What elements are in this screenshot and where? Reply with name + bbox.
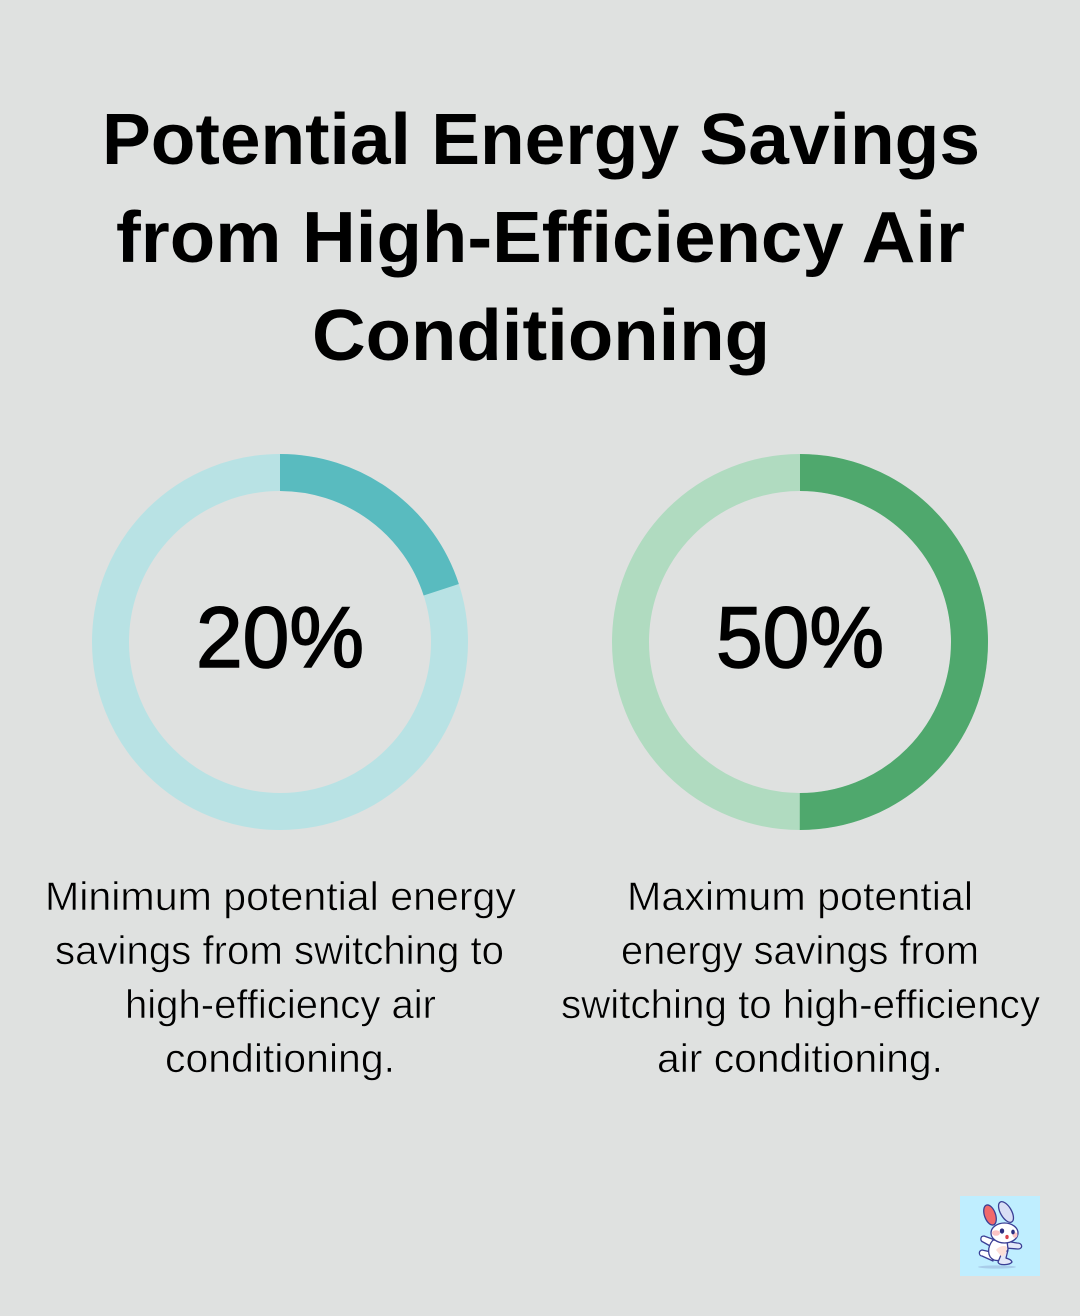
- front leg: [998, 1250, 1012, 1265]
- title: Conditioning: [312, 295, 770, 376]
- body: [989, 1240, 1008, 1260]
- back leg: [979, 1250, 993, 1261]
- face: [992, 1230, 1000, 1236]
- value: 50%: 50%: [716, 590, 884, 686]
- right ear: [995, 1199, 1017, 1225]
- donut chart: 50%: [630, 472, 970, 812]
- title: Potential Energy Savings: [102, 99, 980, 180]
- panel: minimum savings: [45, 472, 516, 1081]
- left ear: [981, 1203, 999, 1227]
- title: [102, 99, 980, 376]
- description: maximum savings: energy savings from: [621, 929, 979, 973]
- icon: rabbit logo: [960, 1196, 1040, 1276]
- arms: [981, 1236, 995, 1247]
- head: [991, 1223, 1018, 1243]
- description: maximum savings: [561, 875, 1040, 1081]
- donut chart: 20%: [110, 472, 450, 812]
- description: minimum savings: savings from switching to: [55, 929, 504, 973]
- description: minimum savings: Minimum potential energy: [45, 875, 516, 919]
- description: minimum savings: conditioning.: [165, 1037, 395, 1081]
- title: from High-Efficiency Air: [116, 197, 965, 278]
- description: maximum savings: air conditioning.: [657, 1037, 943, 1081]
- value: 20%: 20%: [196, 590, 364, 686]
- description: maximum savings: switching to high-efficiency: [561, 983, 1040, 1027]
- panel: maximum savings: [561, 472, 1040, 1081]
- description: minimum savings: [45, 875, 516, 1081]
- description: minimum savings: high-efficiency air: [125, 983, 436, 1027]
- description: maximum savings: Maximum potential: [627, 875, 973, 919]
